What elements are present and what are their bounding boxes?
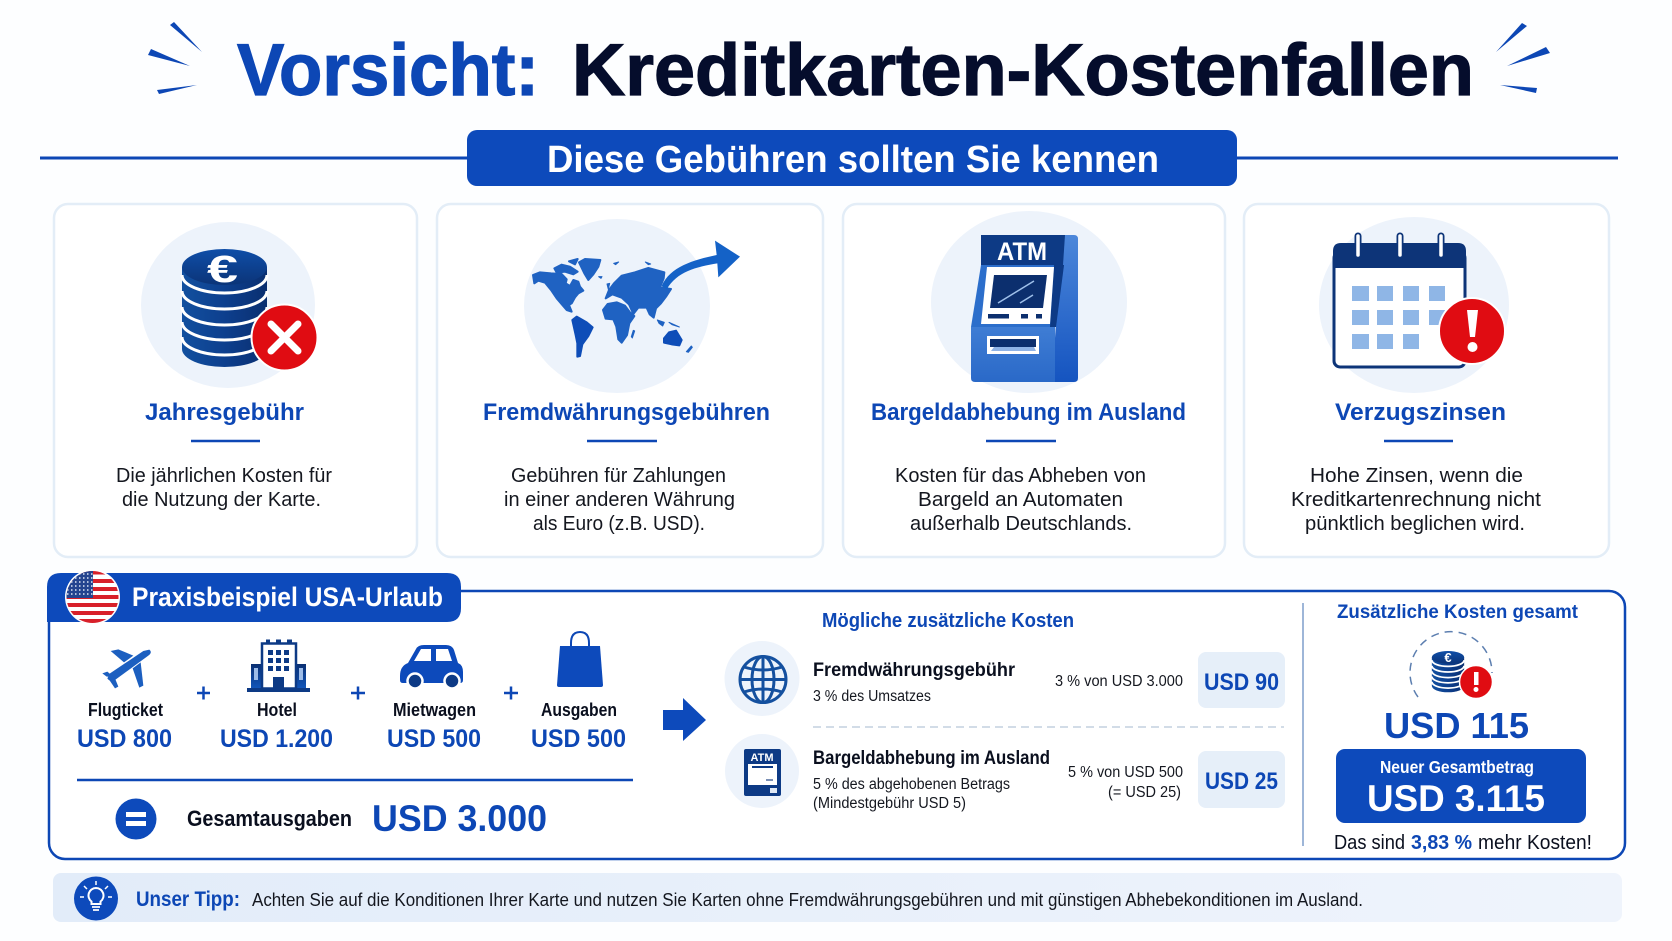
panel: Praxisbeispiel USA-Urlaub — [47, 570, 1625, 859]
total additional costs: mehr Kosten! — [1478, 832, 1592, 854]
description — [895, 465, 1146, 535]
cost item: Mietwagen — [387, 645, 481, 753]
plus — [504, 686, 518, 700]
title: Kreditkarten-Kostenfallen — [572, 30, 1474, 111]
total additional costs: 3,83 % — [1411, 832, 1472, 854]
cost row: Bargeldabhebung im Ausland: USD 25 — [1205, 768, 1278, 795]
icon: world map with arrow — [524, 219, 740, 393]
total additional costs: Zusätzliche Kosten gesamt — [1337, 602, 1579, 623]
tip bar — [53, 873, 1622, 922]
description: Bargeld an Automaten — [918, 489, 1123, 511]
cost item: Flugticket: Flugticket — [88, 700, 163, 720]
cost item: Ausgaben — [531, 632, 626, 753]
cost item: Ausgaben: Ausgaben — [541, 700, 617, 720]
cost row: Bargeldabhebung im Ausland — [725, 734, 1285, 812]
description: als Euro (z.B. USD). — [533, 513, 705, 535]
total additional costs: € — [1444, 650, 1452, 665]
total additional costs: USD 3.115 — [1367, 778, 1545, 819]
description: Kreditkartenrechnung nicht — [1291, 489, 1541, 511]
cost row: Fremdwährungsgebühr — [724, 641, 1285, 716]
cost row: Bargeldabhebung im Ausland: (= USD 25) — [1108, 784, 1181, 801]
cost item: Hotel — [220, 641, 333, 753]
tip bar: Unser Tipp: — [136, 888, 240, 911]
total expenses — [116, 798, 547, 840]
description: Die jährlichen Kosten für — [116, 465, 332, 487]
section heading banner: Diese Gebühren sollten Sie kennen — [547, 139, 1159, 181]
panel: Jahresgebühr — [54, 204, 417, 557]
panel heading tab — [47, 573, 461, 622]
cost row: Fremdwährungsgebühr: Fremdwährungsgebühr — [813, 660, 1016, 681]
cost row: Fremdwährungsgebühr: 3 % von USD 3.000 — [1055, 673, 1183, 690]
icon: ATM machine — [931, 211, 1127, 393]
icon: left attention sparks — [148, 22, 202, 94]
icon: light bulb — [74, 876, 118, 920]
cost item: Ausgaben: USD 500 — [531, 725, 626, 753]
cost row: Bargeldabhebung im Ausland: (Mindestgebühr USD 5) — [813, 795, 966, 812]
heading: Fremdwährungsgebühren — [483, 399, 770, 426]
cost item: Hotel: Hotel — [257, 700, 297, 720]
cost item: Hotel: USD 1.200 — [220, 725, 333, 753]
arrow — [663, 698, 706, 741]
total additional costs: Neuer Gesamtbetrag — [1380, 757, 1534, 777]
description — [1291, 465, 1541, 535]
cost row: Bargeldabhebung im Ausland: 5 % von USD 500 — [1068, 764, 1183, 781]
icon: ATM machine: ATM — [997, 238, 1047, 266]
cost row: Bargeldabhebung im Ausland: Bargeldabhebung im Ausland — [813, 748, 1050, 769]
panel: Bargeldabhebung im Ausland — [843, 204, 1225, 557]
icon: US flag — [65, 570, 120, 624]
plus — [197, 686, 210, 700]
description: in einer anderen Währung — [504, 489, 735, 511]
panel: Verzugszinsen — [1244, 204, 1609, 557]
total additional costs — [1334, 602, 1592, 854]
icon: euro coins with red cross: € — [207, 249, 238, 291]
description — [504, 465, 735, 535]
icon: right attention sparks — [1496, 23, 1550, 93]
icon: calendar with warning — [1319, 217, 1509, 393]
heading: Bargeldabhebung im Ausland — [871, 399, 1186, 426]
cost item: Mietwagen: Mietwagen — [393, 700, 476, 720]
plus — [351, 686, 365, 700]
total additional costs: USD 115 — [1384, 705, 1529, 746]
heading: Jahresgebühr — [145, 399, 304, 426]
title: Vorsicht: — [237, 30, 539, 111]
panel heading tab: Praxisbeispiel USA-Urlaub — [132, 582, 443, 612]
cost item: Flugticket — [77, 649, 172, 753]
tip bar: Achten Sie auf die Konditionen Ihrer Karte und nutzen Sie Karten ohne Fremdwährungsgebühren und mit günstigen Abhebekonditionen im Ausland. — [252, 890, 1363, 910]
description: pünktlich beglichen wird. — [1305, 513, 1525, 535]
section heading banner — [40, 130, 1618, 186]
description: die Nutzung der Karte. — [122, 489, 321, 511]
description — [116, 465, 332, 511]
description: Kosten für das Abheben von — [895, 465, 1146, 487]
cost row: Bargeldabhebung im Ausland: 5 % des abgehobenen Betrags — [813, 776, 1010, 793]
cost item: Mietwagen: USD 500 — [387, 725, 481, 753]
heading: Verzugszinsen — [1335, 399, 1506, 426]
icon: euro coins with red cross — [141, 222, 318, 388]
description: außerhalb Deutschlands. — [910, 513, 1132, 535]
total expenses: USD 3.000 — [372, 798, 547, 839]
cost row: Fremdwährungsgebühr: USD 90 — [1204, 669, 1279, 696]
description: Hohe Zinsen, wenn die — [1310, 465, 1523, 487]
panel: Fremdwährungsgebühren — [437, 204, 823, 557]
total additional costs: Das sind — [1334, 832, 1405, 854]
description: Gebühren für Zahlungen — [511, 465, 726, 487]
cost item: Flugticket: USD 800 — [77, 725, 172, 753]
cost row: Fremdwährungsgebühr: 3 % des Umsatzes — [813, 688, 931, 705]
total expenses: Gesamtausgaben — [187, 806, 352, 831]
cost row: Bargeldabhebung im Ausland: ATM — [750, 752, 774, 764]
additional costs heading: Mögliche zusätzliche Kosten — [822, 610, 1074, 632]
